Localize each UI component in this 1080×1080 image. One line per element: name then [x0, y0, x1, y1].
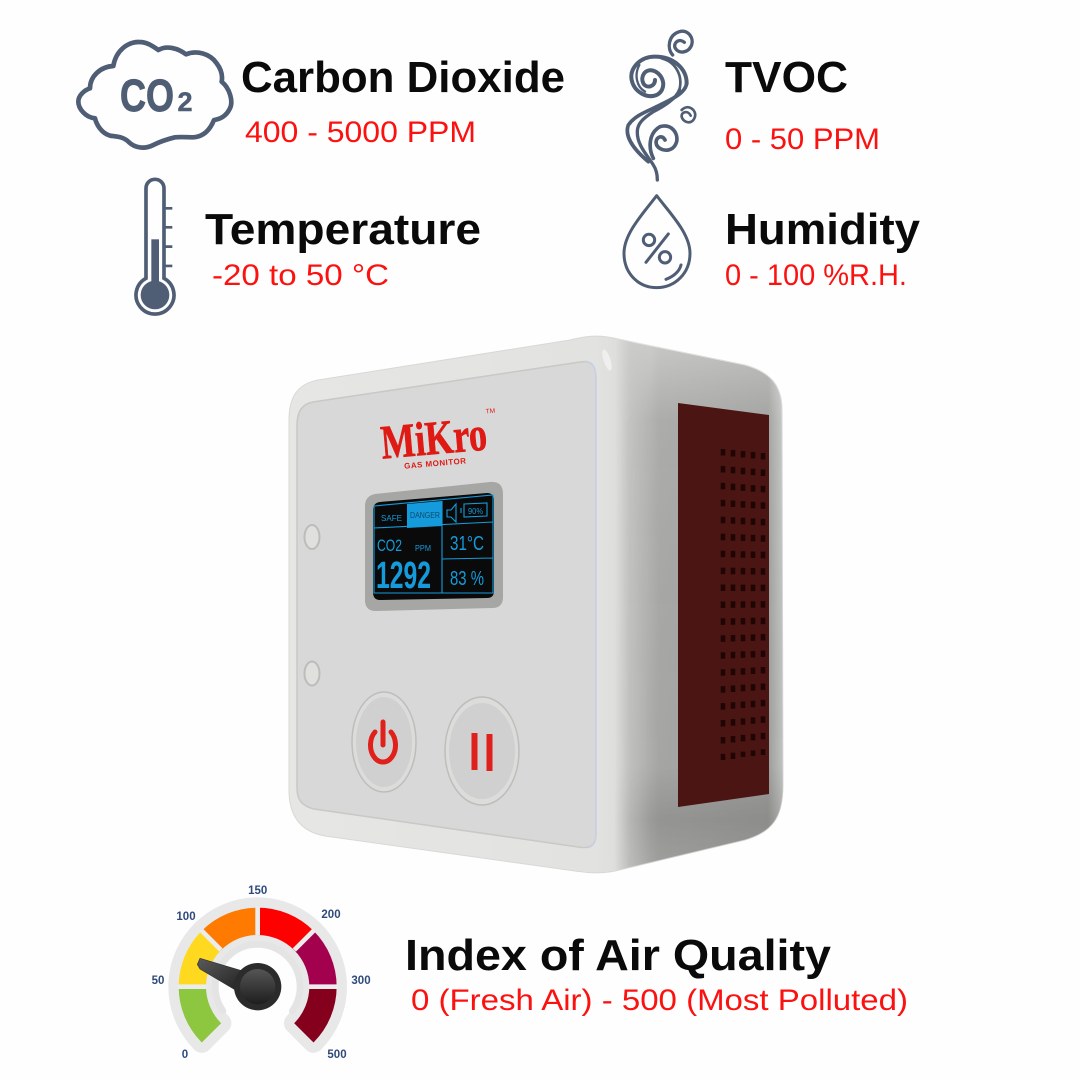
power button	[352, 692, 416, 792]
gauge labels	[152, 885, 371, 1061]
range: humidity: 0 - 100 %R.H.	[725, 259, 907, 292]
gauge inner band	[215, 944, 300, 1011]
icon: CO2 cloud: 2	[178, 87, 193, 117]
logo: MiKro	[379, 408, 489, 470]
display readouts: 31°C	[450, 533, 484, 555]
front panel	[297, 362, 596, 848]
gauge hub	[234, 963, 281, 1010]
display	[373, 493, 494, 600]
icon: TVOC swirl	[627, 31, 695, 180]
range: air quality: 0 (Fresh Air) - 500 (Most Polluted)	[411, 984, 908, 1017]
danger highlight	[407, 501, 442, 528]
side shading	[615, 338, 783, 871]
gauge labels: 500	[327, 1049, 347, 1061]
icon: CO2 cloud	[78, 42, 231, 148]
display readouts	[376, 503, 487, 597]
icon: thermometer	[136, 179, 174, 314]
device body	[289, 336, 783, 873]
LED indicators	[304, 525, 320, 686]
gauge labels: 300	[351, 975, 371, 987]
gauge labels: 0	[182, 1049, 188, 1061]
display readouts: CO2	[377, 536, 402, 555]
pause button	[445, 697, 519, 805]
heading: TVOC: TVOC	[725, 53, 848, 102]
gauge labels: 50	[152, 975, 164, 987]
gauge labels: 150	[248, 885, 267, 897]
screen bezel	[365, 482, 503, 611]
corner highlight	[600, 348, 614, 372]
speaker holes	[723, 449, 763, 760]
device: MiKro gas monitor	[289, 336, 783, 873]
display readouts: 1292	[376, 555, 431, 597]
gauge: air quality	[152, 885, 371, 1061]
side speaker panel	[678, 403, 769, 807]
logo: GAS MONITOR	[404, 456, 467, 471]
display grid lines	[374, 495, 493, 593]
range: CO2: 400 - 5000 PPM	[245, 116, 476, 149]
display readouts: 90%	[468, 507, 483, 516]
logo: TM	[485, 408, 495, 415]
range: temperature: -20 to 50 °C	[212, 259, 389, 292]
gauge labels: 100	[176, 911, 196, 923]
gauge segments	[192, 921, 323, 1033]
gauge labels: 200	[321, 909, 341, 921]
display readouts: SAFE	[381, 513, 402, 523]
icon: CO2 cloud: CO	[120, 70, 174, 121]
display readouts: 83 %	[450, 568, 484, 590]
gauge needle	[197, 958, 245, 992]
display readouts: DANGER	[410, 510, 440, 520]
heading: Index of Air Quality: Index of Air Quality	[405, 931, 832, 980]
panel edge highlight	[585, 361, 596, 848]
display readouts: PPM	[415, 544, 431, 553]
range: TVOC: 0 - 50 PPM	[725, 123, 880, 156]
icon: humidity drop	[624, 196, 690, 288]
gauge track	[179, 908, 337, 1043]
heading: Carbon Dioxide: Carbon Dioxide	[241, 53, 565, 102]
heading: Humidity: Humidity	[725, 205, 921, 254]
heading: Temperature: Temperature	[205, 205, 481, 254]
